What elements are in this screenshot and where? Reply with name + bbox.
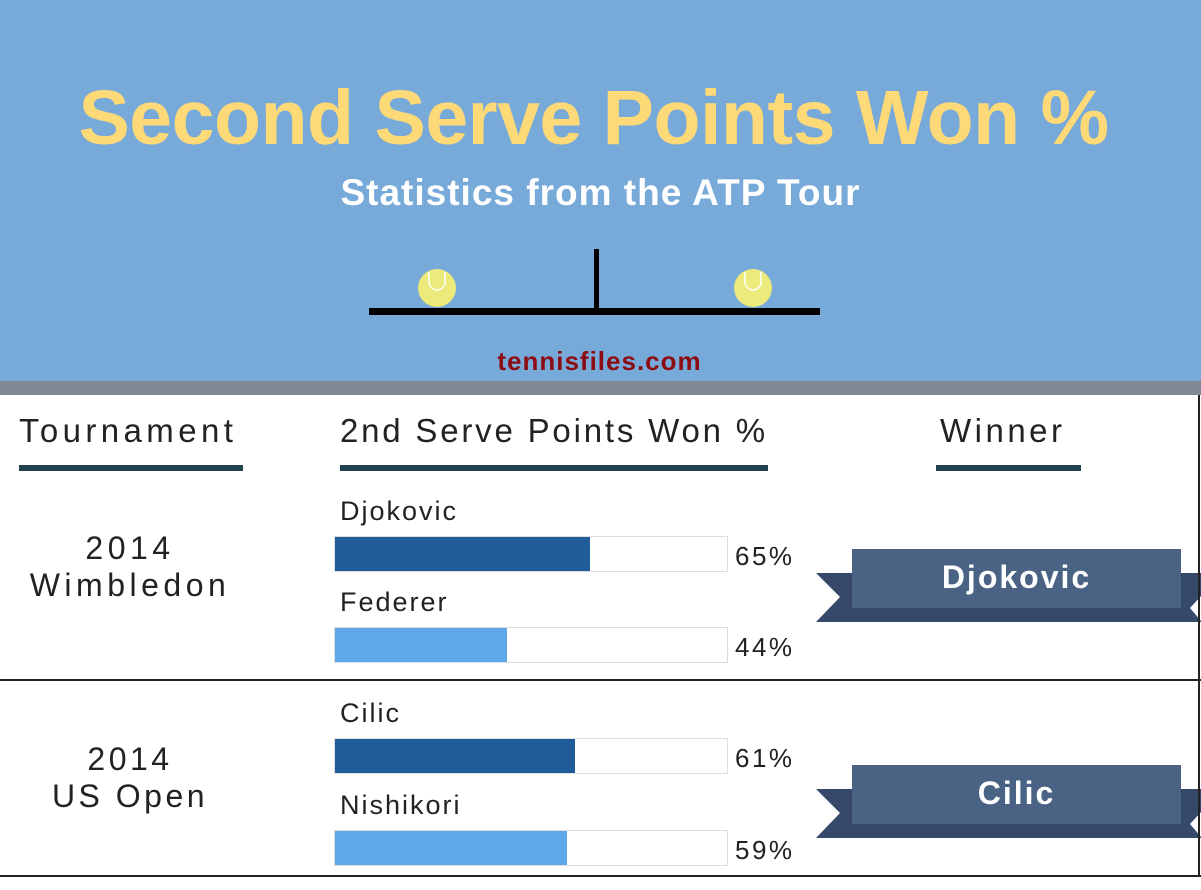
tournament label <box>52 741 208 814</box>
source: tennisfiles.com <box>497 346 702 376</box>
title: Second Serve Points Won % <box>78 75 1109 161</box>
tournament label <box>30 530 230 603</box>
column heading: Winner <box>936 412 1081 471</box>
column heading: Tournament <box>19 412 243 471</box>
row: US Open <box>52 698 1201 866</box>
tournament label: 2014 <box>87 741 173 777</box>
bar: Nishikori: Nishikori <box>340 790 462 820</box>
bar: Djokovic <box>334 496 795 572</box>
bar: Cilic <box>334 698 795 774</box>
header banner <box>0 0 1201 381</box>
ribbon: winner Djokovic: Djokovic <box>942 559 1091 595</box>
bar: Djokovic: Djokovic <box>340 496 458 526</box>
tournament label: US Open <box>52 778 208 814</box>
ribbon: winner Cilic <box>816 765 1201 838</box>
tournament label: Wimbledon <box>30 567 230 603</box>
bar: Djokovic: 65% <box>735 541 795 571</box>
icon: tennis court net with balls <box>369 249 820 315</box>
column heading: 2nd serve <box>340 412 768 471</box>
bar: Cilic: Cilic <box>340 698 401 728</box>
column heading: Winner: Winner <box>940 412 1066 449</box>
bar: Federer <box>334 587 795 663</box>
bar: Federer: Federer <box>340 587 449 617</box>
tournament label: 2014 <box>85 530 175 566</box>
subtitle: Statistics from the ATP Tour <box>340 172 861 213</box>
bar: Nishikori: 59% <box>735 835 795 865</box>
column heading: Tournament: Tournament <box>19 412 237 449</box>
ribbon: winner Cilic: Cilic <box>978 775 1055 811</box>
column heading: 2nd serve: 2nd Serve Points Won % <box>340 412 768 449</box>
ribbon: winner Djokovic <box>816 549 1201 622</box>
bar: Cilic: 61% <box>735 743 795 773</box>
row: Wimbledon <box>30 496 1201 663</box>
bar: Federer: 44% <box>735 632 795 662</box>
bar: Nishikori <box>334 790 795 866</box>
